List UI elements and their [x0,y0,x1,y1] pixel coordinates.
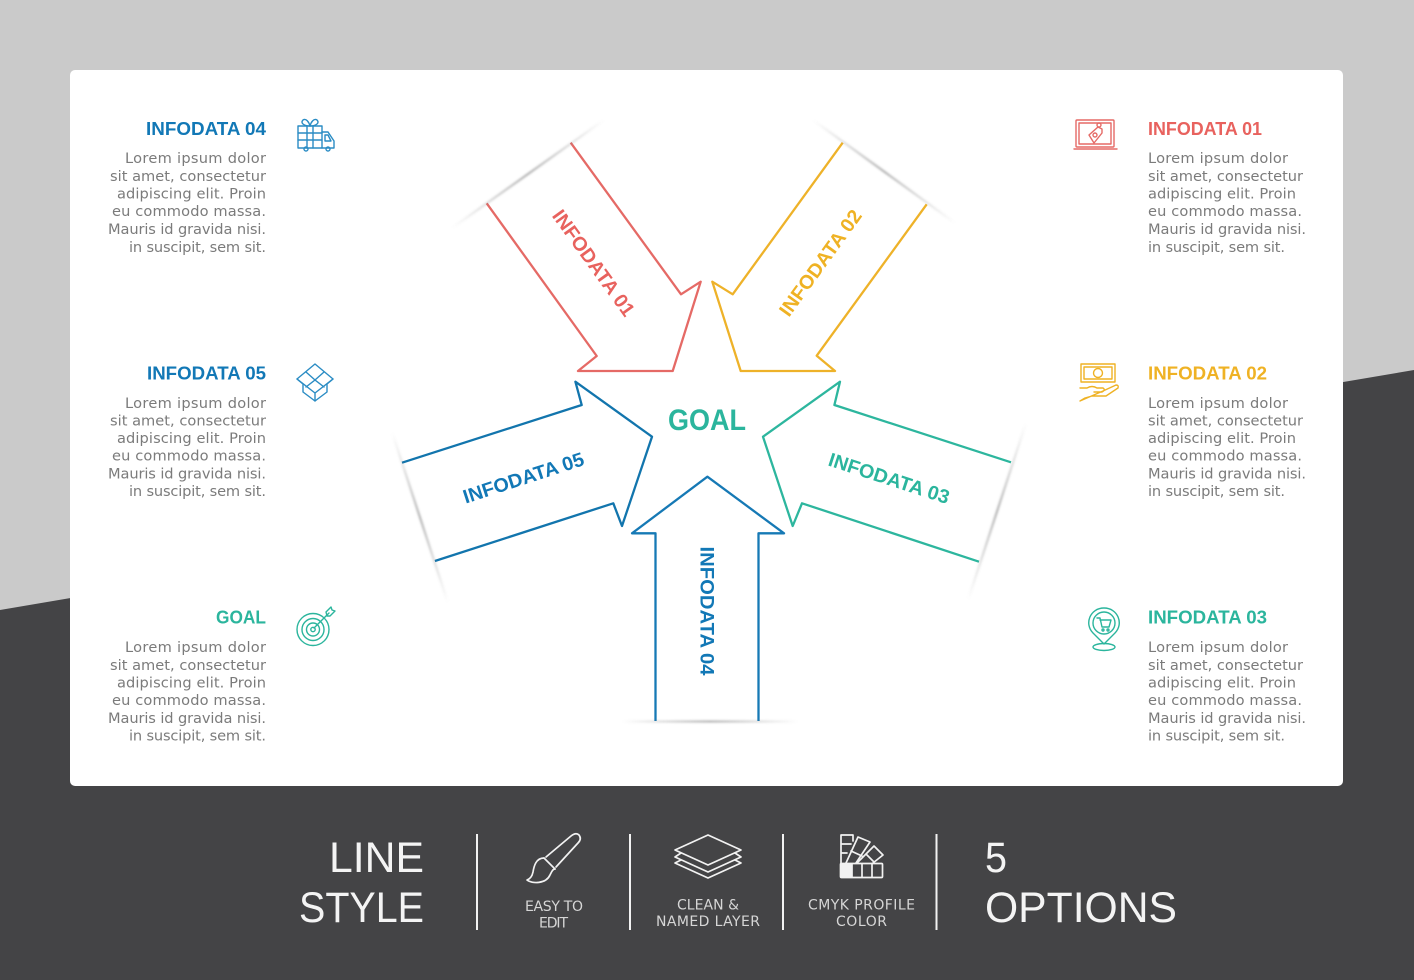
footer feature: clean and named layer: NAMED LAYER [656,914,760,930]
text block: infodata 03: adipiscing elit. Proin [1148,674,1296,692]
text block: goal [108,608,266,744]
text block: infodata 05: sit amet, consectetur [110,412,266,430]
icon: shopping location pin [1089,608,1119,650]
text block: infodata 04: in suscipit, sem sit. [129,239,266,256]
icon: gift delivery truck [298,119,334,151]
shadow: arrow 04 base [622,720,798,722]
icon: hand holding money [1080,364,1118,401]
text block: infodata 04: INFODATA 04 [146,119,266,139]
icon: stacked layers [675,835,741,878]
text block: infodata 01: in suscipit, sem sit. [1148,239,1285,256]
footer heading: line style: STYLE [299,884,424,932]
text block: infodata 01: adipiscing elit. Proin [1148,186,1296,202]
text block: infodata 05: in suscipit, sem sit. [129,483,266,500]
icon: target with arrow [297,607,335,646]
text block: infodata 01: Lorem ipsum dolor [1148,150,1288,167]
text block: infodata 05: INFODATA 05 [147,364,266,384]
text block: infodata 04: Lorem ipsum dolor [125,150,266,167]
footer feature: easy to edit: EASY TO [525,899,583,915]
text block: infodata 05: Mauris id gravida nisi. [108,466,266,482]
footer feature: easy to edit: EDIT [539,916,568,932]
text block: infodata 02: sit amet, consectetur [1148,412,1303,430]
text block: infodata 03: Lorem ipsum dolor [1148,639,1288,656]
text block: goal: sit amet, consectetur [110,657,266,674]
text block: infodata 01: eu commodo massa. [1148,203,1302,220]
text block: infodata 05: eu commodo massa. [112,448,266,464]
text block: goal: in suscipit, sem sit. [129,728,266,744]
text block: infodata 02: eu commodo massa. [1148,448,1302,464]
footer feature: clean and named layer [656,835,760,930]
shadow: arrow 02 base [813,120,955,223]
text block: infodata 03: INFODATA 03 [1148,608,1267,628]
arrow: infodata 01: INFODATA 01 [547,206,639,321]
footer feature: clean and named layer: CLEAN & [677,898,739,914]
footer heading: line style: LINE [329,834,424,882]
text block: infodata 04: adipiscing elit. Proin [117,186,266,202]
text block: infodata 02: INFODATA 02 [1148,364,1267,384]
shadow: arrow 03 base [968,423,1026,600]
footer feature: easy to edit [525,834,583,932]
footer heading: 5 options: OPTIONS [985,884,1177,932]
background: dark slanted band [0,370,1414,980]
text block: infodata 04: sit amet, consectetur [110,168,266,185]
arrow: infodata 02: INFODATA 02 [775,206,867,321]
arrow: infodata 03 [763,382,1011,562]
text block: infodata 04 [108,119,266,256]
icon: colour swatch fan [840,835,883,878]
text block: infodata 02: Lorem ipsum dolor [1148,395,1288,412]
text block: goal: Mauris id gravida nisi. [108,710,266,727]
arrow: infodata 05 [402,382,652,561]
footer heading: 5 options: 5 [985,834,1007,882]
text block: infodata 04: eu commodo massa. [112,203,266,220]
footer dividers [477,834,936,930]
text block: goal: Lorem ipsum dolor [125,639,266,656]
arrow: infodata 01 [487,143,701,371]
text block: infodata 03 [1148,608,1306,744]
text block: infodata 01: sit amet, consectetur [1148,168,1303,185]
arrow: infodata 03: INFODATA 03 [826,449,952,509]
arrow: infodata 02 [712,143,927,371]
text block: infodata 02: in suscipit, sem sit. [1148,483,1285,500]
icon: open box [297,364,333,401]
text block: infodata 03: eu commodo massa. [1148,692,1302,709]
text block: infodata 03: sit amet, consectetur [1148,657,1303,674]
text block: goal: eu commodo massa. [112,692,266,709]
icon: laptop with price tag [1074,120,1117,149]
text block: infodata 05: adipiscing elit. Proin [117,430,266,447]
footer heading: line style [299,834,424,932]
text block: infodata 01 [1148,119,1306,256]
icon: paint brush [527,834,580,883]
arrow: infodata 04: INFODATA 04 [696,546,718,676]
footer feature: cmyk profile color: CMYK PROFILE [808,898,915,914]
center label: goal: GOAL [668,404,746,437]
text block: infodata 05: Lorem ipsum dolor [125,395,266,412]
text block: infodata 05 [108,364,266,500]
panel: white card [70,70,1343,786]
diagram: five arrows pointing to goal [392,120,1026,722]
shadow: arrow 01 base [452,120,604,228]
text block: infodata 04: Mauris id gravida nisi. [108,221,266,238]
arrow: infodata 04 [632,477,784,721]
arrow: infodata 05: INFODATA 05 [460,448,587,508]
text block: infodata 03: Mauris id gravida nisi. [1148,710,1306,727]
text block: infodata 02 [1148,364,1306,500]
text block: infodata 03: in suscipit, sem sit. [1148,728,1285,744]
text block: infodata 01: INFODATA 01 [1148,119,1262,139]
footer feature: cmyk profile color [808,835,915,930]
text block: goal: adipiscing elit. Proin [117,674,266,692]
text block: goal: GOAL [216,608,266,628]
text block: infodata 02: adipiscing elit. Proin [1148,430,1296,447]
text block: infodata 01: Mauris id gravida nisi. [1148,221,1306,238]
text block: infodata 02: Mauris id gravida nisi. [1148,466,1306,482]
footer feature: cmyk profile color: COLOR [836,914,887,930]
shadow: arrow 05 base [392,432,448,603]
footer heading: 5 options [985,834,1177,932]
